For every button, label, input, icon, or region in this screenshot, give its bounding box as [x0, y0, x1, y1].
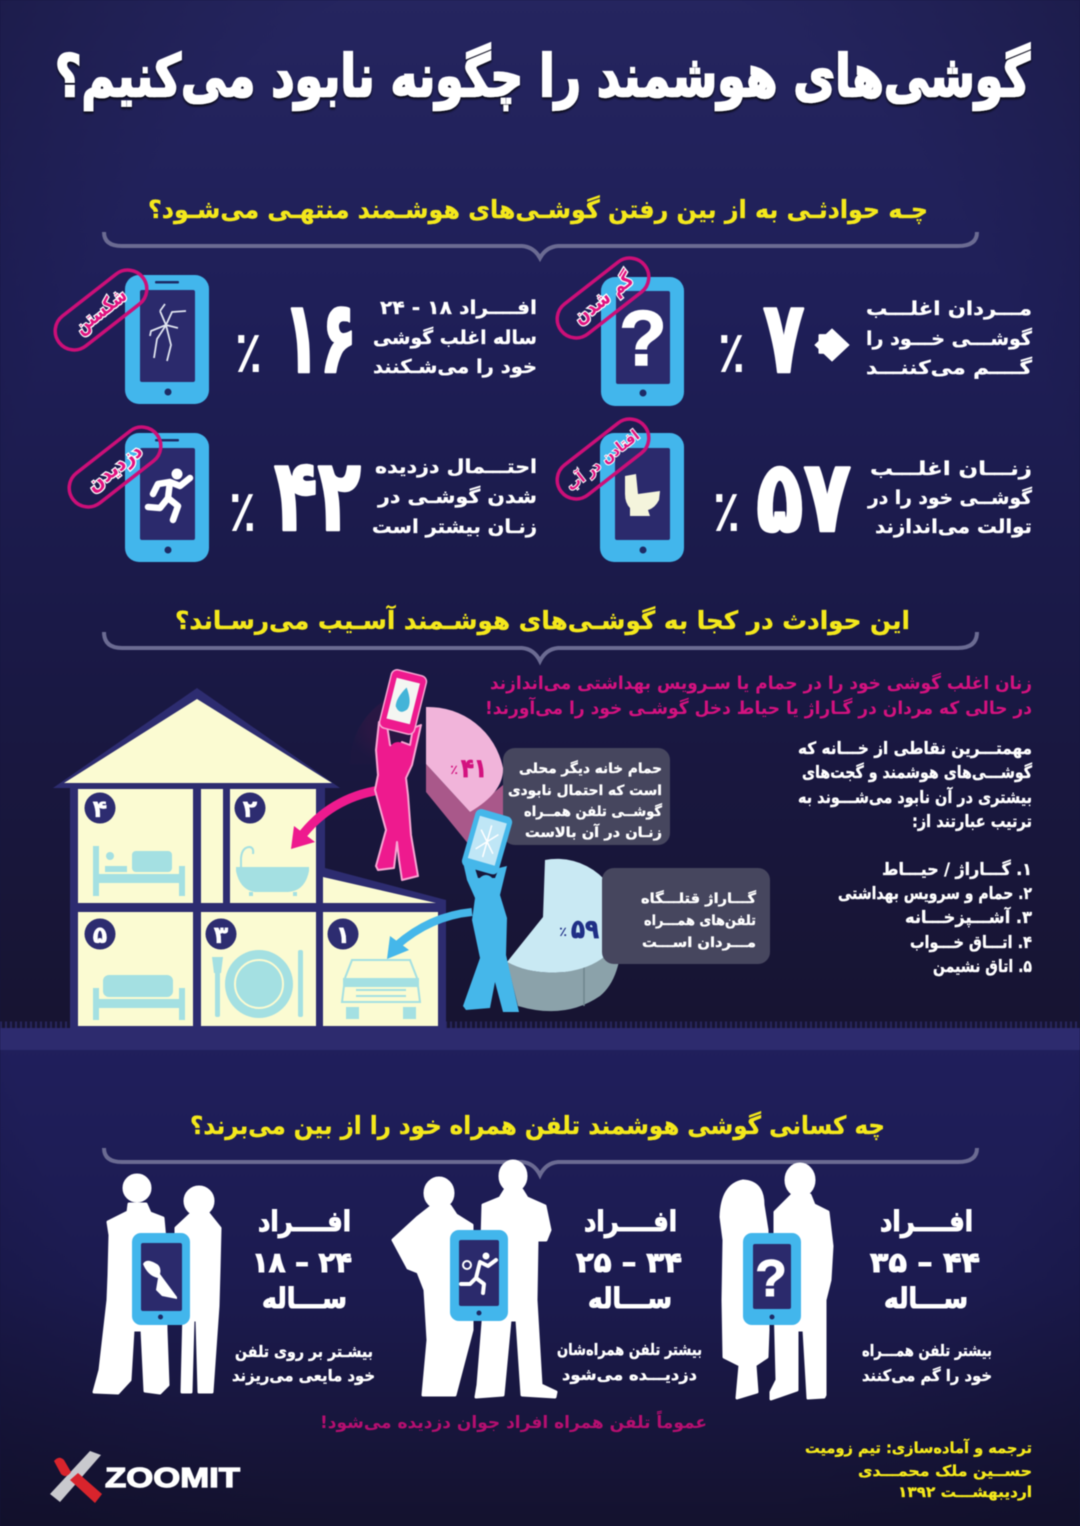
list: rooms ranking: ۵. اتاق نشیمن: [933, 957, 1032, 977]
text: women drop: [867, 458, 1033, 538]
number: 16 percent: ۱۶: [283, 279, 357, 396]
number: 16 percent: [235, 279, 357, 396]
text: stolen: دزدیـــده می‌شود: [562, 1365, 697, 1384]
text: 18-24: افــــراد ۱۸ - ۲۴: [380, 297, 537, 319]
icon: broken phone: [125, 275, 209, 404]
text: theft probability: احتـــمال دزدیده: [375, 456, 537, 478]
pie: men 59 percent: [507, 859, 622, 1011]
box: women bathroom text: زنـان در آن بالاست: [525, 823, 662, 841]
text: pink summary: در حالی که مردان در گـاراژ یا حیاط دخل گوشـی خود را می‌آورند!: [485, 696, 1032, 719]
text: women drop: گوشــی خود را در: [867, 486, 1033, 509]
text: most dangerous spots: [798, 739, 1032, 832]
icon: sofa room 5: [93, 975, 185, 1020]
text: most dangerous spots: گوشـــی‌های هوشمند و گجت‌های: [802, 762, 1032, 783]
text: most dangerous spots: ترتیب عبارتند از:: [912, 812, 1032, 832]
pie label 41: [450, 754, 487, 784]
text: age 25-34: ســـاله: [588, 1282, 672, 1315]
pie label 59: ٪: [559, 925, 567, 940]
group: ages 35-44: [721, 1164, 992, 1399]
panel: lost phone stat: [550, 250, 1033, 406]
pie: women 41 percent: [350, 688, 503, 846]
box: women bathroom text: گوشــی تلفن همــراه: [524, 803, 663, 820]
number: 70 percent: [718, 279, 849, 396]
callout: young people: عموماً تلفن همراه افراد جوان دزدیده می‌شود!: [320, 1409, 707, 1433]
badge 1: [328, 918, 358, 950]
box: women bathroom text: است که احتمال نابودی: [508, 783, 662, 799]
number: 16 percent: ٪: [235, 318, 262, 386]
logo: zoomit: ZOOMIT: [105, 1462, 240, 1493]
icon: car: [342, 960, 420, 1019]
text: age 35-44: ســـاله: [884, 1282, 968, 1315]
icon: phone with question mark: ?: [755, 1250, 787, 1308]
box: men garage text: تلفن‌های همـــراه: [644, 913, 756, 929]
text: pink summary: [485, 672, 1032, 719]
badge 2: ۲: [243, 795, 258, 823]
text: lose phone: بیشتر تلفن همـــراه: [862, 1341, 992, 1360]
number: 57 percent: [713, 438, 851, 555]
bracket 2: [104, 632, 977, 661]
silhouette: older couple: [721, 1164, 832, 1399]
text: lose phone: [862, 1341, 992, 1385]
text: theft probability: [372, 456, 537, 538]
text: age 18-24: ۲۴ – ۱۸: [252, 1246, 352, 1279]
text: age 18-24: افــــراد: [258, 1205, 351, 1238]
text: age 18-24: ســـاله: [262, 1282, 347, 1315]
list: rooms ranking: ۱. گـــاراژ / حیـــاط: [882, 859, 1032, 880]
text: men lose: [866, 298, 1033, 379]
icon: lost phone: [601, 277, 684, 406]
label pill: breaking: [48, 262, 154, 358]
box: men garage text: مـــردان اســـت: [642, 935, 756, 951]
icon: toilet phone: [600, 433, 684, 562]
text: 18-24: [373, 297, 537, 378]
group: ages 18-24: [94, 1175, 375, 1393]
text: age 25-34: افــــراد: [584, 1205, 677, 1238]
badge 1: ۱: [336, 921, 350, 949]
badge 2: [234, 792, 266, 824]
text: most dangerous spots: مهمتـــرین نقاطی از خـــانه که: [798, 739, 1032, 759]
badge 5: [84, 918, 116, 950]
text: theft probability: شدن گوشـی در: [377, 485, 537, 508]
arrow: pink to bathroom: [291, 790, 380, 849]
badge 3: [206, 918, 236, 950]
pie label 59: ۵۹: [571, 915, 599, 945]
figure: woman with phone: [375, 669, 428, 880]
bracket 1: [104, 232, 977, 258]
text: age 35-44: [870, 1205, 980, 1315]
icon: bathtub: [236, 847, 309, 896]
icon: plate and cutlery: [212, 950, 303, 1018]
number: 57 percent: ۵۷: [756, 438, 851, 555]
credits: حســین ملک محمـــدی: [858, 1462, 1032, 1480]
number: 70 percent: ۷۰: [763, 279, 846, 396]
house: [53, 688, 446, 1030]
label pill: theft: [62, 419, 168, 515]
icon: phone with spill: [132, 1233, 190, 1325]
pie label 41: ۴۱: [461, 754, 487, 784]
number: 70 percent: ٪: [718, 318, 745, 386]
text: age 18-24: [252, 1205, 352, 1315]
list: rooms ranking: ۴. اتـــاق خـــواب: [910, 933, 1032, 953]
icon: phone with question mark: [743, 1233, 801, 1325]
ground strip: [0, 1028, 1080, 1050]
label pill: theft: دزدیدن: [82, 438, 147, 497]
text: men lose: مـــردان اغلـــب: [866, 298, 1032, 320]
panel: broken phone stat: [48, 262, 537, 404]
logo: zoomit: [50, 1451, 240, 1503]
list: rooms ranking: [838, 859, 1033, 977]
house structure: [53, 688, 446, 1030]
text: men lose: گــــم می‌کننـــد: [866, 356, 1033, 379]
silhouette: two men: [393, 1161, 556, 1397]
heading: where: این حوادث در کجا به گوشـی‌های هوشـمند آسـیب می‌رسـاند؟: [175, 605, 910, 636]
list: rooms ranking: ۲. حمام و سرویس بهداشتی: [838, 884, 1033, 904]
box: women bathroom text: [503, 748, 670, 845]
badge 3: ۳: [214, 921, 229, 949]
panel: dropped in toilet stat: [550, 411, 1033, 562]
text: theft probability: زنـان بیشتر است: [372, 516, 537, 538]
label pill: lost: گم شدن: [568, 267, 638, 329]
text: men lose: گوشـــی خـــود را: [866, 327, 1033, 350]
text: age 25-34: [576, 1205, 682, 1315]
text: most dangerous spots: بیشتری در آن نابود می‌شـــوند به: [798, 786, 1032, 808]
badge 4: [84, 792, 116, 824]
box: men garage text: [602, 868, 770, 964]
text: women drop: توالت می‌اندازند: [875, 516, 1032, 538]
text: age 35-44: ۴۴ – ۳۵: [870, 1246, 980, 1279]
text: lose phone: خود را گم می‌کنند: [862, 1366, 992, 1385]
credits: اردیبهشـــت ۱۳۹۲: [898, 1483, 1032, 1501]
credits: [805, 1439, 1032, 1501]
list: rooms ranking: ۳. آشـــپزخـــانه: [905, 906, 1033, 928]
silhouette: young couple: [94, 1175, 220, 1393]
label pill: dropped in water: افتادن در آب: [563, 426, 643, 495]
box: women bathroom text: حمام خانه دیگر محلی: [519, 760, 662, 777]
icon: phone with thief: [450, 1230, 508, 1321]
text: 18-24: خود را می‌شـکنند: [373, 356, 537, 378]
number: 42 percent: ٪: [229, 477, 256, 545]
box: men garage text: گـــاراژ قتلـــگاه: [641, 890, 757, 907]
label pill: breaking: شکستن: [69, 283, 131, 339]
label pill: dropped in water: [550, 411, 656, 507]
label pill: lost: [550, 250, 656, 346]
icon: lost phone: ?: [619, 294, 667, 382]
text: 18-24: ساله اغلب گوشی: [373, 326, 537, 349]
panel: stolen phone stat: [62, 419, 537, 562]
heading: who: چه کسانی گوشی هوشمند تلفن همراه خود را از بین می‌برند؟: [190, 1111, 885, 1141]
text: age 25-34: ۳۴ – ۲۵: [576, 1246, 682, 1279]
pie label 59: [559, 915, 599, 945]
text: spill liquid: بیشـتر بر روی تلفن: [235, 1342, 373, 1361]
figure: man with phone: [387, 808, 519, 1012]
number: 57 percent: ٪: [713, 477, 740, 545]
bracket 3: [104, 1148, 977, 1175]
group: ages 25-34: [393, 1161, 702, 1397]
icon: stolen phone: [125, 433, 209, 562]
pie label 41: ٪: [450, 763, 458, 778]
number: 42 percent: [229, 437, 361, 554]
text: spill liquid: [232, 1342, 375, 1385]
heading: what incidents: چـه حوادثـی به از بین رفتن گوشـی‌های هوشـمند منتهـی می‌شـود؟: [148, 195, 928, 225]
badge 5: ۵: [93, 921, 107, 949]
badge 4: ۴: [93, 795, 107, 823]
number: 42 percent: ۴۲: [274, 437, 361, 554]
text: spill liquid: خود مایعی می‌ریزند: [232, 1366, 375, 1385]
text: age 35-44: افــــراد: [880, 1205, 973, 1238]
icon: bed room 4: [93, 846, 185, 896]
text: stolen: بیشتر تلفن همراه‌شان: [557, 1340, 702, 1359]
text: stolen: [557, 1340, 702, 1384]
text: women drop: زنـــان اغلـــب: [870, 458, 1032, 480]
text: pink summary: زنان اغلب گوشی خود را در حمام یا سـرویس بهداشتی می‌اندازند: [490, 672, 1032, 694]
credits: ترجمه و آماده‌سازی: تیم زومیت: [805, 1439, 1032, 1457]
